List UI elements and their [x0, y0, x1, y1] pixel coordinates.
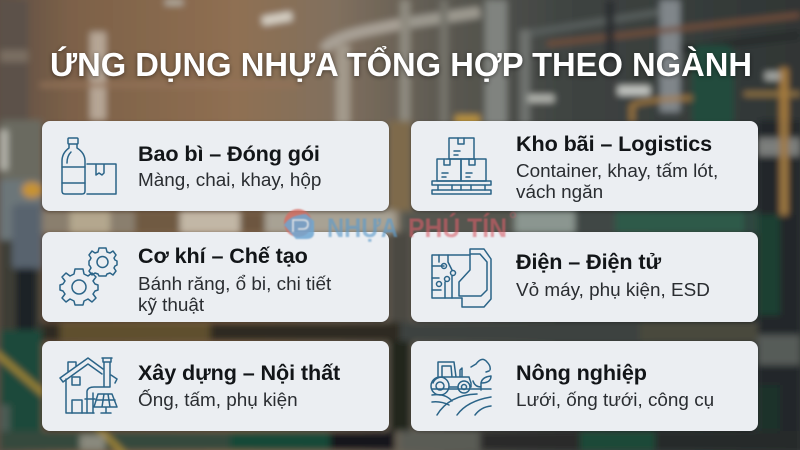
mid gap	[0, 211, 400, 233]
description: Container, khay, tấm lót,	[516, 161, 718, 182]
panel: Điện – Điện tử	[411, 232, 758, 322]
panel: Xây dựng – Nội thất	[42, 341, 389, 431]
heading: Cơ khí – Chế tạo	[138, 243, 308, 268]
panel: Cơ khí – Chế tạo	[42, 232, 389, 322]
panel: Nông nghiệp	[411, 341, 758, 431]
right strip	[758, 120, 800, 450]
icon: circuit board and housing	[431, 248, 492, 308]
panel: Kho bãi – Logistics	[411, 121, 758, 211]
icon: gears	[59, 247, 118, 306]
panel: Bao bì – Đóng gói	[42, 121, 389, 211]
icon: boxes on pallet	[431, 137, 492, 195]
description: Ống, tấm, phụ kiện	[138, 390, 298, 410]
watermark logo	[284, 208, 516, 243]
heading: Nông nghiệp	[516, 360, 647, 385]
centre column	[389, 121, 411, 211]
heading: Xây dựng – Nội thất	[138, 360, 340, 385]
description: Màng, chai, khay, hộp	[138, 170, 321, 190]
icon: house with pipes and solar panel	[59, 357, 118, 414]
title: ỨNG DỤNG NHỰA TỔNG HỢP THEO NGÀNH	[50, 46, 752, 84]
watermark logo: NHỰA	[327, 213, 398, 243]
description: Lưới, ống tưới, công cụ	[516, 390, 714, 410]
heading: Bao bì – Đóng gói	[138, 140, 320, 166]
icon: tractor and field	[430, 358, 492, 416]
heading: Điện – Điện tử	[516, 249, 661, 274]
left strip with worker	[0, 120, 42, 450]
description	[138, 274, 332, 316]
bottom	[0, 431, 320, 450]
description: vách ngăn	[516, 182, 603, 203]
description: Bánh răng, ổ bi, chi tiết	[138, 274, 331, 294]
description	[516, 161, 718, 203]
description: Vỏ máy, phụ kiện, ESD	[516, 280, 710, 300]
row 2-3 gap	[0, 322, 800, 342]
watermark logo: PHÚ TÍN	[408, 212, 507, 243]
icon: bottle and box	[61, 137, 117, 195]
description: kỹ thuật	[138, 294, 204, 316]
heading: Kho bãi – Logistics	[516, 131, 712, 156]
